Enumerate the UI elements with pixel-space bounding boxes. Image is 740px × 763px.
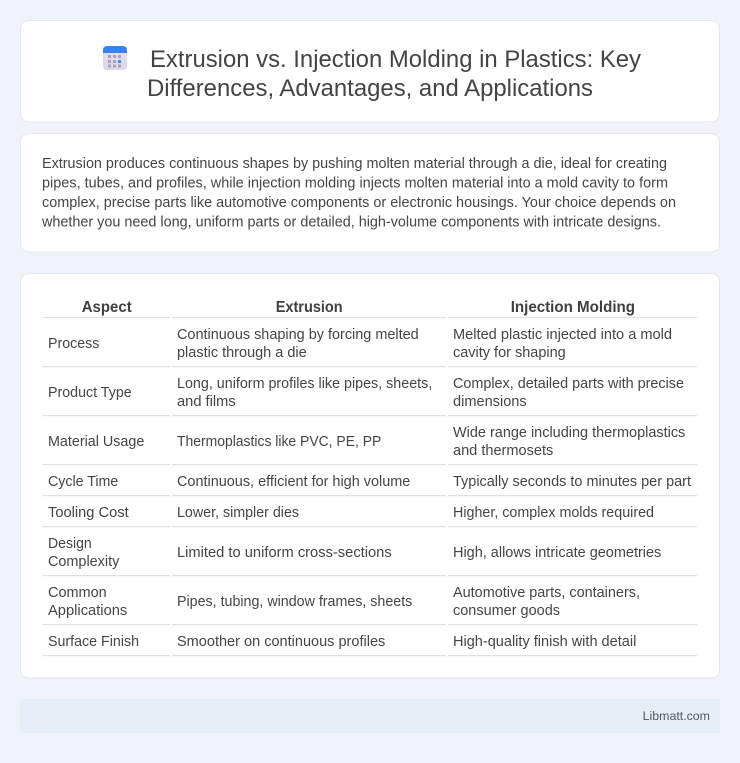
row: product type: Long, uniform profiles like pipes, sheets,	[177, 376, 432, 392]
row: product type: Complex, detailed parts with precise	[453, 376, 684, 392]
panel: summary	[20, 134, 720, 252]
row: material usage: Thermoplastics like PVC, PE, PP	[177, 434, 381, 450]
row: common applications: Common	[48, 585, 107, 601]
row: product type: Product Type	[48, 385, 132, 401]
row: surface finish	[48, 634, 636, 650]
summary paragraph: pipes, tubes, and profiles, while injection molding injects molten material into a mold cavity to form	[42, 176, 668, 192]
summary paragraph: Extrusion produces continuous shapes by pushing molten material through a die, ideal for creating	[42, 156, 667, 172]
row: material usage: Material Usage	[48, 434, 144, 450]
row: product type	[48, 376, 684, 410]
row: process: cavity for shaping	[453, 345, 566, 361]
row: design complexity	[48, 536, 661, 570]
row: process: Process	[48, 336, 99, 352]
row: surface finish: Surface Finish	[48, 634, 139, 650]
row: material usage: Wide range including thermoplastics	[453, 425, 685, 441]
row: process: Continuous shaping by forcing melted	[177, 327, 419, 343]
summary paragraph: complex, precise parts like automotive components or electronic housings. Your choice depends on	[42, 195, 676, 211]
row: common applications: Pipes, tubing, window frames, sheets	[177, 594, 412, 610]
table header row: Extrusion	[276, 299, 343, 316]
row: cycle time: Cycle Time	[48, 474, 118, 490]
table header row	[82, 299, 635, 316]
row: tooling cost: Tooling Cost	[48, 505, 129, 521]
row: cycle time: Typically seconds to minutes per part	[453, 474, 691, 490]
row: common applications: Automotive parts, containers,	[453, 585, 640, 601]
row: surface finish: High-quality finish with detail	[453, 634, 636, 650]
footer brand text: Libmatt.com	[643, 709, 710, 723]
row: tooling cost	[48, 505, 654, 521]
title: Extrusion vs. Injection Molding in Plastics: Key	[150, 46, 642, 73]
row: design complexity: Complexity	[48, 554, 120, 570]
row: design complexity: Design	[48, 536, 92, 552]
row: process	[48, 327, 672, 361]
row: material usage: and thermosets	[453, 443, 553, 459]
row: material usage	[48, 425, 685, 459]
panel: title header	[20, 20, 720, 122]
footer bar	[20, 699, 720, 733]
title	[147, 46, 642, 102]
icon: calendar	[103, 46, 127, 70]
summary paragraph: whether you need long, uniform parts or detailed, high-volume components with intricate designs.	[41, 214, 661, 230]
row: process: Melted plastic injected into a mold	[453, 327, 672, 343]
title: Differences, Advantages, and Applications	[147, 75, 593, 102]
row: design complexity: Limited to uniform cross-sections	[177, 545, 392, 561]
summary paragraph	[41, 156, 676, 230]
row: tooling cost: Higher, complex molds required	[453, 505, 654, 521]
row: design complexity: High, allows intricate geometries	[453, 545, 661, 561]
row: tooling cost: Lower, simpler dies	[177, 505, 299, 521]
row: common applications: consumer goods	[453, 603, 560, 619]
panel: comparison table	[20, 274, 720, 678]
row: common applications: Applications	[48, 603, 127, 619]
table header row: Aspect	[82, 299, 132, 316]
row: surface finish: Smoother on continuous profiles	[177, 634, 385, 650]
row: common applications	[48, 585, 640, 619]
row: cycle time	[48, 474, 691, 490]
row: process: plastic through a die	[177, 345, 307, 361]
row: product type: and films	[177, 394, 236, 410]
row: cycle time: Continuous, efficient for high volume	[177, 474, 410, 490]
table header row: Injection Molding	[511, 299, 635, 316]
row: product type: dimensions	[453, 394, 527, 410]
